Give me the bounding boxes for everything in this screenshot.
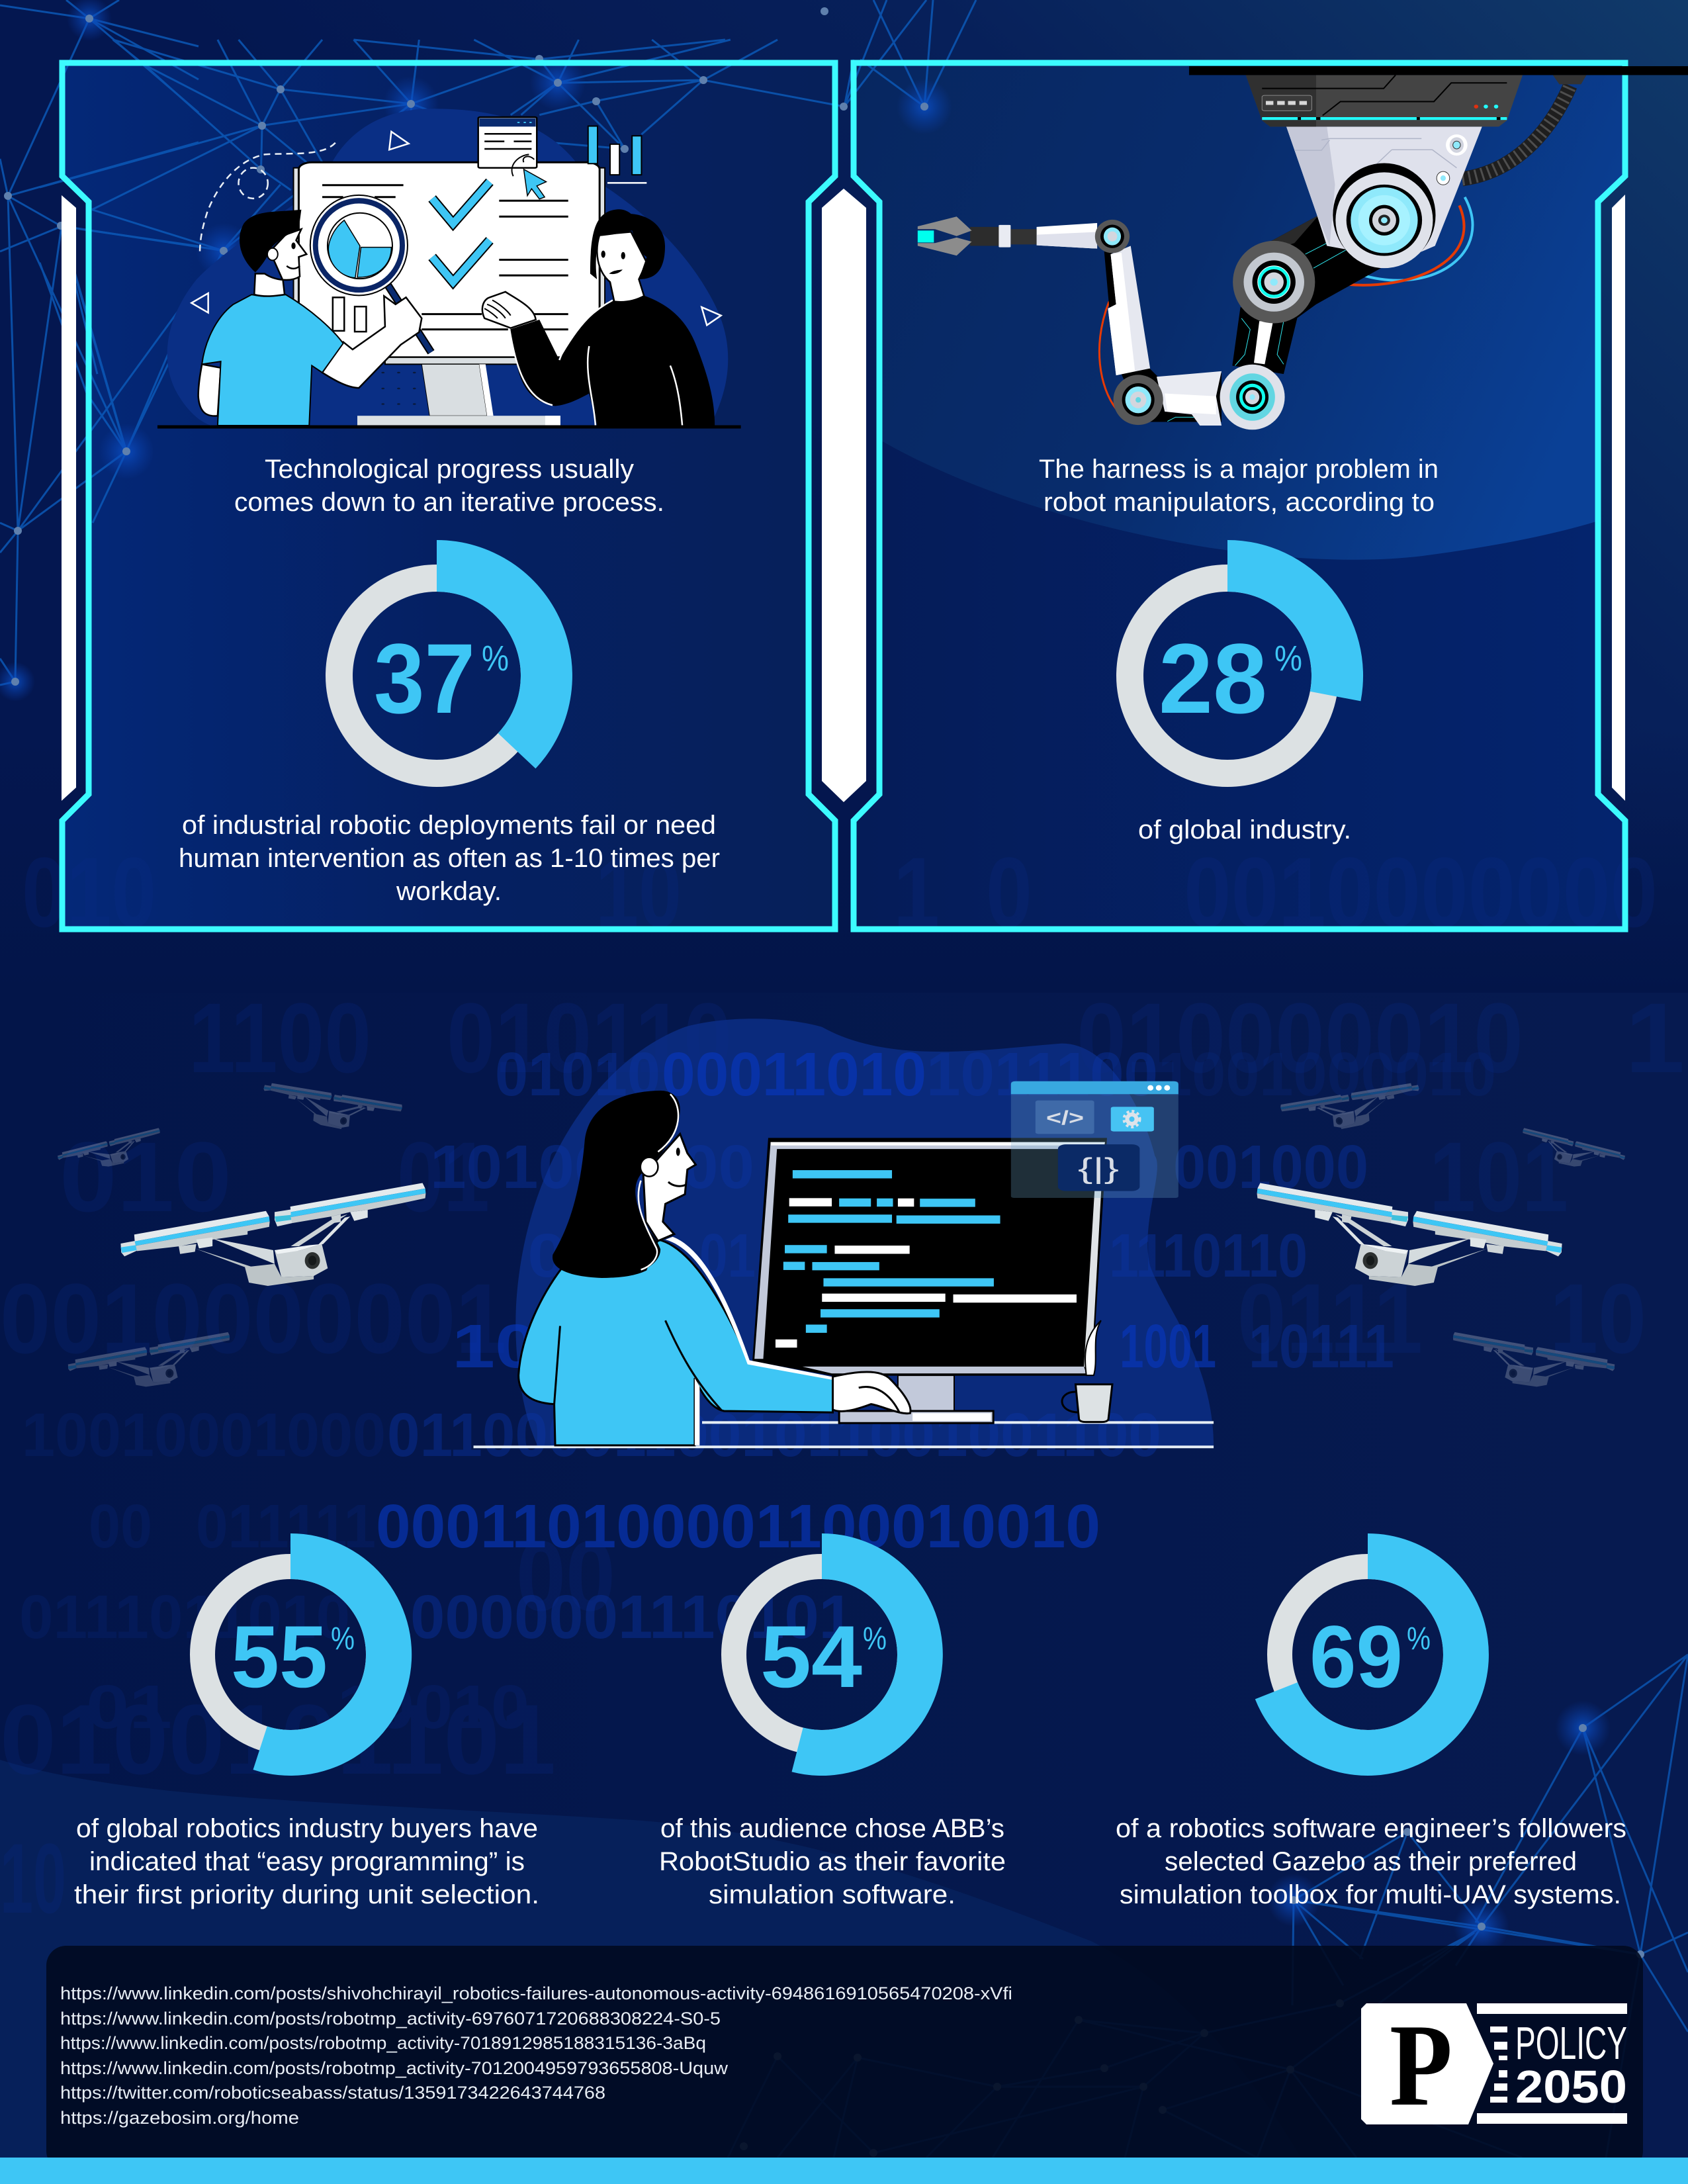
text: 54% description: [659, 1814, 1006, 1909]
binary digit background: [0, 837, 1685, 1934]
illustration: two people reviewing a screen: [157, 109, 741, 427]
source links: [60, 1983, 1012, 2128]
binary digit background: 1001: [1120, 1312, 1216, 1381]
binary digit background: 1100: [189, 982, 371, 1093]
donut chart: 37%: 37: [374, 623, 475, 734]
binary digit background: 1: [893, 837, 940, 948]
side bar: left: [62, 195, 76, 801]
donut chart: 54%: [734, 1533, 943, 1776]
donut chart: 55%: 55: [231, 1608, 328, 1706]
donut chart: 28%: [1130, 540, 1363, 773]
blob behind programmer: [515, 1019, 1214, 1447]
text: technological progress: [234, 455, 664, 517]
binary digit background: 10: [0, 1823, 66, 1934]
binary digit background: 1110110: [1109, 1221, 1308, 1290]
text: technological progress: comes down to an iterative process.: [234, 488, 664, 517]
binary digit background: 10: [596, 837, 682, 948]
drone: small middle right: [1521, 1128, 1626, 1170]
source links: https://www.linkedin.com/posts/robotmp_activity-7012004959793655808-Uquw: [60, 2058, 729, 2078]
text: 54% description: RobotStudio as their favorite: [659, 1847, 1006, 1876]
logo: Policy 2050: POLICY: [1515, 2017, 1627, 2069]
programmer figure and monitor: [474, 1091, 1214, 1447]
network web: top left nodes: [0, 0, 952, 702]
text: 54% description: simulation software.: [709, 1880, 955, 1909]
text: harness problem: The harness is a major problem in: [1039, 455, 1439, 484]
panel: sources: [46, 1946, 1643, 2171]
text: 37% description: human intervention as often as 1-10 times per: [179, 844, 720, 873]
text: 54% description: of this audience chose ABB’s: [660, 1814, 1004, 1843]
donut chart: 55%: [202, 1533, 412, 1776]
text: 55% description: of global robotics industry buyers have: [76, 1814, 538, 1843]
drone: large right: [1257, 1183, 1562, 1286]
binary digit background: 10010001000: [22, 1400, 386, 1469]
binary digit background: 1001000010: [1158, 1040, 1496, 1109]
source links: https://www.linkedin.com/posts/shivohchirayil_robotics-failures-autonomous-activity-6948616910565470208-xVfi: [60, 1983, 1012, 2003]
binary digit background: 010110: [447, 982, 732, 1093]
binary digit background: 011000011001011001001100: [387, 1400, 1161, 1469]
source links: https://www.linkedin.com/posts/robotmp_activity-6976071720688308224-S0-5: [60, 2009, 721, 2028]
binary digit background: 00011010: [662, 1040, 926, 1109]
binary digit background: 010000010: [1077, 982, 1523, 1093]
binary digit background: 010: [60, 1121, 232, 1232]
illustration: programmer at computer: [474, 1081, 1214, 1447]
drone: large left: [120, 1183, 425, 1286]
binary digit background: 101000000: [430, 1132, 754, 1201]
logo: Policy 2050: 2050: [1515, 2061, 1627, 2113]
binary digit background: 001000: [1173, 1132, 1368, 1201]
stat: 54%: [659, 1533, 1006, 1909]
binary digit background: 0111011010: [19, 1582, 350, 1651]
text: 69% description: [1116, 1814, 1626, 1909]
source links: https://www.linkedin.com/posts/robotmp_activity-7018912985188315136-3aBq: [60, 2033, 706, 2053]
donut chart: 69%: [1255, 1533, 1489, 1776]
donut chart: 54%: 54: [760, 1608, 862, 1706]
binary digit background: 10010: [337, 1672, 529, 1741]
binary digit background: 0: [986, 837, 1032, 948]
text: harness problem: robot manipulators, according to: [1044, 488, 1435, 517]
logo: Policy 2050: [1361, 1999, 1627, 2130]
drone: small bottom left: [68, 1332, 230, 1387]
binary digit background: 01: [699, 1221, 756, 1290]
binary digit background: 1011100: [926, 1040, 1158, 1109]
footer bar: [0, 2158, 1688, 2184]
floating code window: [1011, 1081, 1178, 1198]
binary digit background: 011111: [196, 1492, 376, 1561]
source links: https://twitter.com/roboticseabass/status/1359173422643744768: [60, 2083, 605, 2103]
divider bar: centre: [822, 189, 866, 802]
binary digit background: 00: [89, 1492, 152, 1561]
text: 55% description: indicated that “easy programming” is: [89, 1847, 525, 1876]
binary digit background: 101: [1429, 1121, 1568, 1232]
binary digit background: 1: [1625, 982, 1685, 1093]
code tag label: </>: [1046, 1107, 1084, 1129]
panel fills: [62, 63, 835, 929]
binary digit background: 0100101101: [0, 1684, 556, 1795]
text: harness problem: [1039, 455, 1439, 517]
text: 69% description: simulation toolbox for multi-UAV systems.: [1120, 1880, 1621, 1909]
logo: Policy 2050: P: [1390, 1999, 1452, 2130]
text: 28% description: of global industry.: [1138, 815, 1351, 844]
binary digit background: 10: [452, 1312, 538, 1381]
donut chart: 55%: %: [331, 1621, 355, 1657]
drones: right group: [1257, 1059, 1626, 1387]
drones: left group: [56, 1059, 425, 1387]
binary digit background: 01010: [495, 1040, 660, 1109]
donut chart: 54%: %: [863, 1621, 887, 1657]
text: 37% description: of industrial robotic deployments fail or need: [182, 811, 716, 840]
binary digit background: 0000001110101: [410, 1582, 854, 1651]
binary digit background: 10: [1550, 1263, 1646, 1374]
drone: small bottom right: [1453, 1332, 1615, 1387]
panel frame: right: [854, 63, 1625, 929]
donut chart: 37%: %: [482, 639, 509, 678]
panel: right, harness problem: [854, 63, 1688, 929]
panel: left, technological progress: [62, 63, 835, 929]
drone: small top right: [1280, 1059, 1425, 1149]
text: 37% description: [179, 811, 720, 906]
text: 69% description: selected Gazebo as their preferred: [1165, 1847, 1577, 1876]
binary digit background: 000110100001100010010: [376, 1492, 1100, 1561]
icon: gear: [1124, 1111, 1139, 1127]
network web: top left: [0, 0, 976, 685]
stat: 55%: [74, 1533, 539, 1909]
donut chart: 28%: %: [1274, 639, 1302, 678]
binary digit background: 0010000001: [0, 1263, 506, 1374]
stat: 69%: [1116, 1533, 1626, 1909]
donut chart: 69%: %: [1407, 1621, 1431, 1657]
binary digit background: 0: [527, 1221, 567, 1290]
side bar: right: [1612, 195, 1625, 801]
binary digit background: 01: [397, 1121, 490, 1232]
binary digit background: 010: [22, 837, 156, 948]
binary digit background: 00: [516, 1520, 615, 1631]
binary digit background: 0111: [1237, 1263, 1423, 1374]
drone: small middle left: [56, 1128, 162, 1170]
source links: https://gazebosim.org/home: [60, 2108, 299, 2128]
text: 55% description: their first priority during unit selection.: [74, 1880, 539, 1909]
network web: bottom right: [728, 1655, 1688, 2158]
drone: small top left: [258, 1059, 403, 1149]
illustration: robot arm: [918, 66, 1688, 430]
donut chart: 28%: 28: [1159, 623, 1267, 734]
text: 55% description: [74, 1814, 539, 1909]
donut chart: 69%: 69: [1310, 1608, 1403, 1706]
binary digit background: 10111: [1249, 1312, 1394, 1381]
donut chart: 37%: [339, 540, 572, 773]
binary digit background: 01: [86, 1672, 172, 1741]
panel frame: left: [62, 63, 835, 929]
text: 37% description: workday.: [396, 877, 502, 906]
text: technological progress: Technological progress usually: [265, 455, 634, 484]
brace label: {|}: [1078, 1152, 1119, 1185]
text: 69% description: of a robotics software engineer’s followers: [1116, 1814, 1626, 1843]
